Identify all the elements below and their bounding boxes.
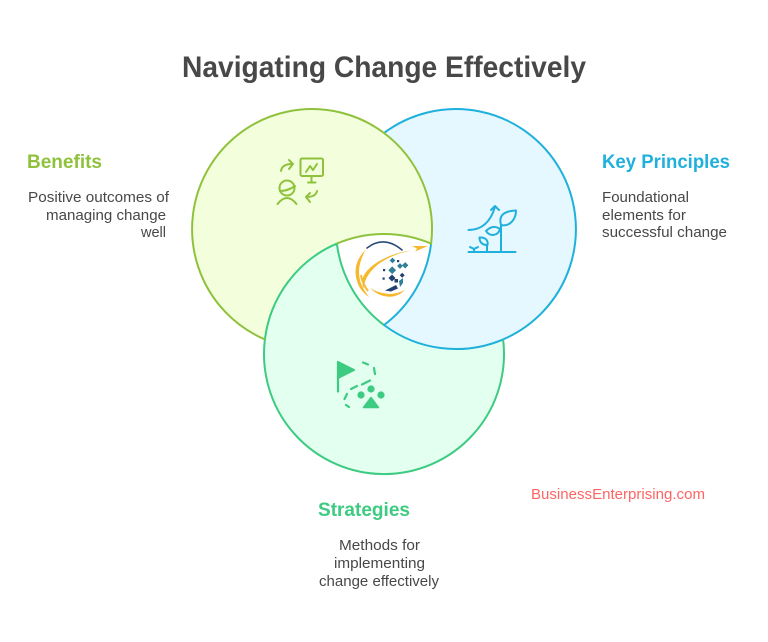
outline: key principles [384, 109, 576, 349]
text: strategies description: Methods for [339, 538, 420, 554]
outline: strategies [264, 244, 504, 474]
panel: key principles circle [336, 109, 576, 349]
text: benefits description: well [140, 225, 166, 241]
outline: benefits [192, 109, 432, 339]
heading: benefits: Benefits [27, 151, 102, 173]
panel: strategies circle [264, 244, 504, 474]
heading: key principles: Key Principles [602, 151, 730, 173]
text: strategies description: implementing [334, 556, 425, 572]
text: key principles description: elements for [602, 208, 686, 224]
panel: benefits circle [192, 109, 432, 339]
icon: growing plants [468, 206, 516, 252]
title: Navigating Change Effectively [182, 51, 586, 84]
text: benefits description: Positive outcomes of [28, 190, 170, 206]
label: strategies [318, 499, 440, 590]
text: key principles description [602, 190, 727, 241]
text: key principles description: Foundational [602, 190, 689, 206]
label: key principles [602, 151, 730, 241]
text: strategies description: change effectively [319, 574, 440, 590]
text: strategies description [319, 538, 440, 590]
icon: flag and route [338, 362, 385, 408]
panel: center overlap [337, 234, 431, 325]
icon: center logo [356, 242, 428, 297]
icon: presenter with chart [278, 158, 323, 204]
venn diagram [192, 109, 576, 474]
text: key principles description: successful change [602, 225, 727, 241]
watermark: BusinessEnterprising.com [531, 487, 705, 503]
label: benefits [27, 151, 170, 241]
text: benefits description: managing change [46, 208, 166, 224]
heading: strategies: Strategies [318, 499, 410, 521]
text: benefits description [28, 190, 170, 241]
